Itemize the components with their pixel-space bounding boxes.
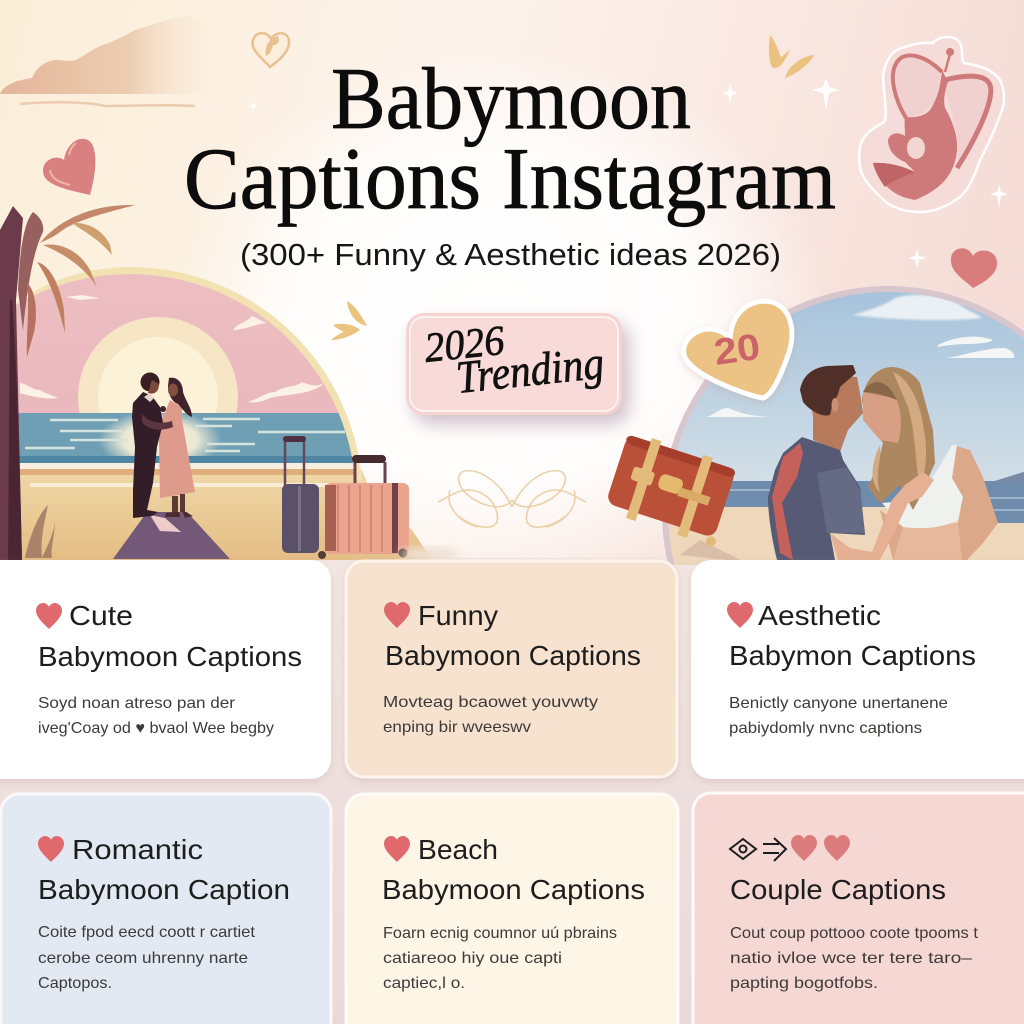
card: aesthetic	[691, 560, 1024, 779]
body text	[383, 925, 617, 992]
illustration: brown suitcase	[603, 431, 740, 548]
illustration: palm tree	[0, 205, 135, 560]
trending badge	[406, 313, 622, 415]
body text: catiareoo hiy oue capti	[383, 950, 562, 967]
icon: small yellow petals	[331, 301, 367, 340]
body text: Benictly canyone unertanene	[729, 695, 948, 712]
heading line 2: Babymoon Captions	[385, 640, 641, 671]
heading line 2: Babymoon Caption	[38, 874, 290, 905]
decorative ribbon swirl	[438, 471, 586, 527]
icon: pink heart right	[951, 248, 997, 288]
card: cute	[0, 560, 331, 779]
trending badge: Trending	[454, 337, 606, 403]
title: Captions Instagram	[184, 131, 836, 228]
body text: cerobe ceom uhrenny narte	[38, 950, 248, 967]
icon: heart	[384, 836, 410, 862]
sparkles	[248, 78, 1008, 268]
illustration: dune grass	[25, 505, 55, 558]
card: couple	[693, 793, 1024, 1024]
couple silhouette	[132, 372, 195, 518]
heading: Aesthetic	[758, 600, 881, 631]
illustration: dark suitcase	[282, 436, 319, 553]
heading line 2: Babymon Captions	[729, 640, 976, 671]
body text: Movteag bcaowet youvwty	[383, 694, 598, 711]
heading line 2: Babymoon Captions	[38, 641, 302, 672]
body text: natio ivloe wce ter tere taro–	[730, 950, 972, 967]
body text	[383, 694, 598, 736]
illustration: sunset beach scene	[0, 260, 432, 560]
card: beach	[346, 794, 678, 1024]
body text	[730, 925, 979, 992]
man's arm	[830, 472, 934, 560]
heading: Beach	[418, 834, 498, 865]
heading line 2: Babymoon Captions	[382, 874, 645, 905]
heading: Cute	[69, 600, 133, 631]
body text	[38, 695, 274, 737]
path	[113, 512, 230, 559]
icon: heart badge 20: 20	[711, 326, 763, 373]
icon: yellow leaves top right	[769, 35, 814, 78]
heading: Couple Captions	[730, 874, 946, 905]
body text: Foarn ecnig coumnor uú pbrains	[383, 925, 617, 942]
icon: heart	[36, 603, 62, 629]
body text: papting bogotfobs.	[730, 975, 878, 992]
icon: heart	[384, 602, 410, 628]
woman	[862, 367, 998, 560]
body text: pabiydomly nvnc captions	[729, 720, 922, 737]
man	[768, 365, 865, 560]
icon: heart badge 20	[684, 301, 792, 398]
icon: outline heart top	[253, 33, 289, 67]
body text: enping bir wveeswv	[383, 719, 531, 736]
body text	[729, 695, 948, 737]
heading: Romantic	[72, 834, 203, 865]
card: romantic	[1, 794, 331, 1024]
icon: heart	[38, 836, 64, 862]
illustration: cloud top left	[0, 15, 215, 106]
icon: heart	[727, 602, 753, 628]
card: funny	[346, 561, 677, 777]
heading: Funny	[418, 600, 498, 631]
sticker: pregnancy silhouette	[859, 37, 1004, 212]
subtitle: (300+ Funny & Aesthetic ideas 2026)	[240, 237, 781, 272]
body text: Captopos.	[38, 975, 112, 992]
trending badge: 2026	[422, 318, 507, 372]
illustration: pink suitcase	[318, 455, 409, 559]
title: Babymoon	[331, 51, 691, 148]
body text: Soyd noan atreso pan der	[38, 695, 236, 712]
title	[184, 51, 836, 228]
body text: Coite fpod eecd coott r cartiet	[38, 924, 256, 941]
illustration: couple beach scene	[662, 286, 1024, 565]
icons: eye, arrow, hearts	[730, 835, 850, 861]
body text: Cout coup pottooo coote tpooms t	[730, 925, 979, 942]
icon: pink heart left	[43, 139, 95, 195]
body text	[38, 924, 256, 992]
sand scatter	[400, 547, 460, 563]
body text: iveg'Coay od ♥ bvaol Wee begby	[38, 720, 274, 737]
body text: captiec,l o.	[383, 975, 465, 992]
